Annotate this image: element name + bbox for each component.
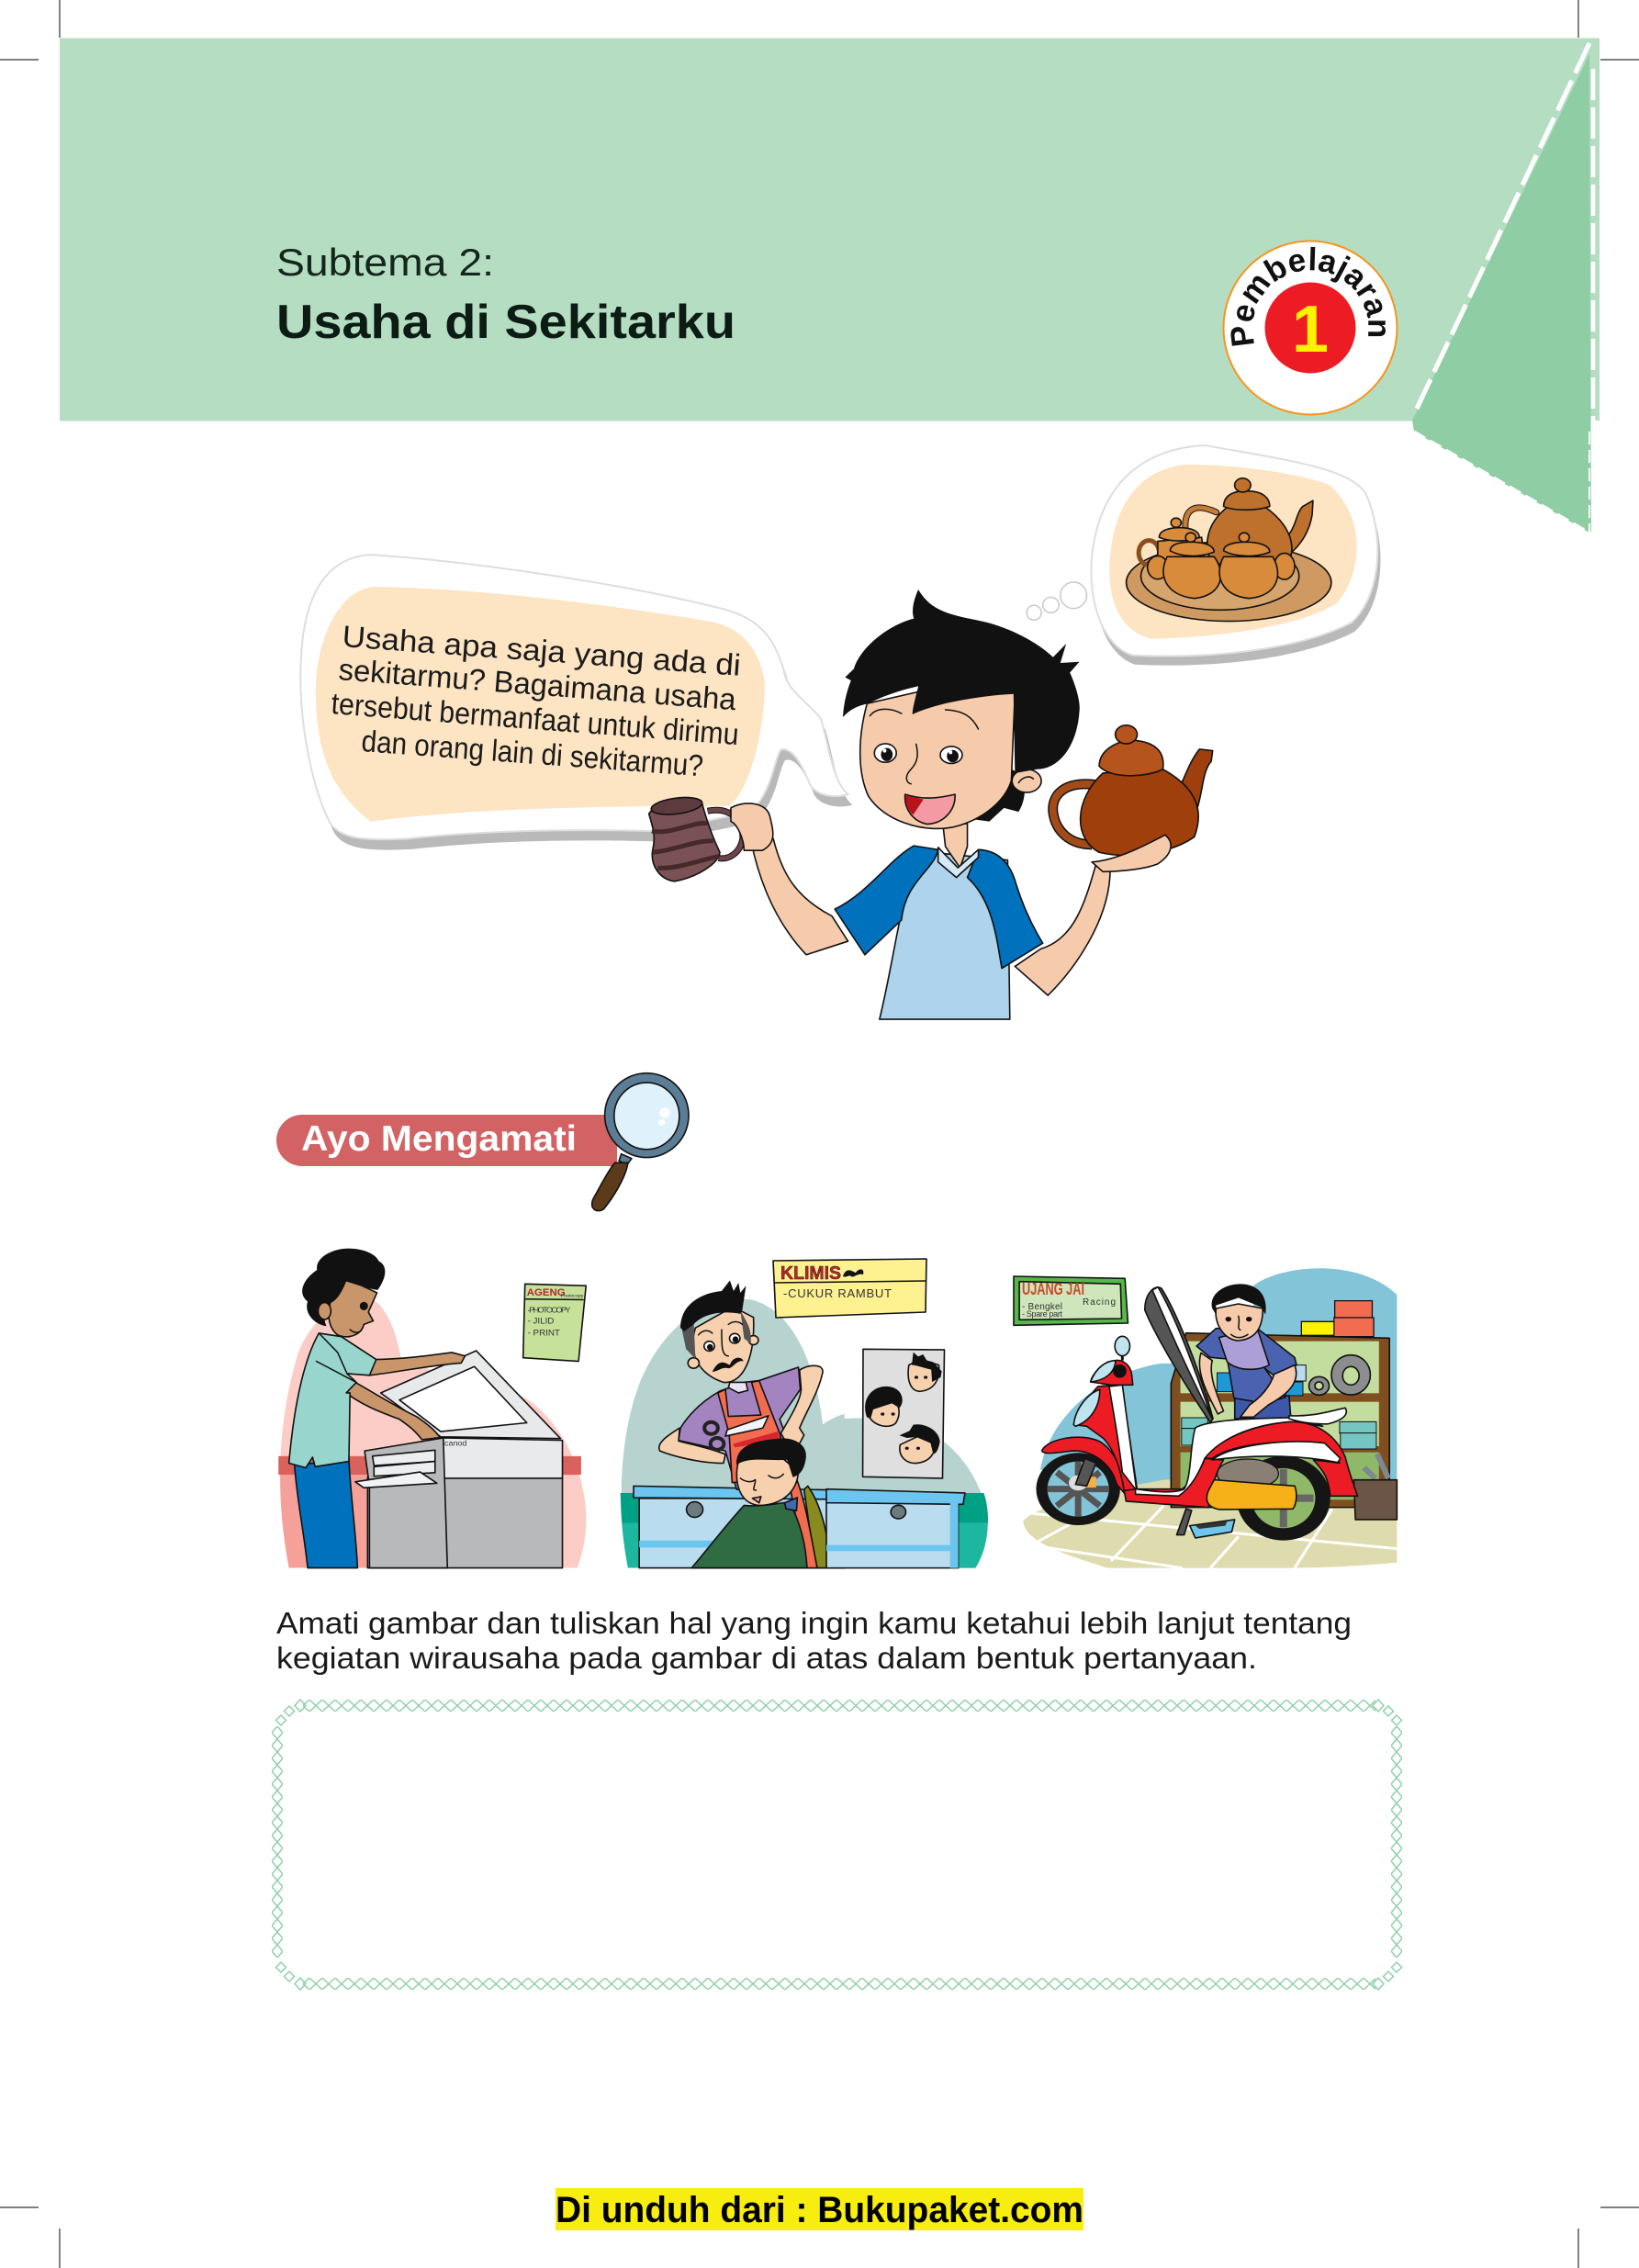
copier: canod [444,1439,467,1447]
badge: Pembelajaran 1: Pembelajaran [1230,246,1386,346]
title: Usaha di Sekitarku [276,296,735,349]
hair [302,1249,385,1326]
bubbles [1027,582,1087,620]
boy character [647,589,1213,1019]
illustration: photocopy shop [278,1249,586,1568]
sign: Ageng photocopy: - PRINT [528,1329,560,1338]
sign text: Ujang Jai: UJANG JAI [1022,1280,1084,1298]
engine panel [1207,1480,1297,1510]
sign: Ageng photocopy: -PHOTOCOPY [528,1306,571,1315]
pink background [280,1298,586,1568]
speech text [330,619,742,782]
leg shield white [1109,1385,1137,1490]
hair [843,589,1080,773]
sign: Ujang Jai [1014,1276,1128,1325]
red rear body [1205,1421,1358,1496]
speech bubble [300,555,852,850]
instruction text [276,1607,1352,1676]
sign: Ageng photocopy [523,1284,586,1362]
speech text: dan orang lain di sekitarmu? [360,724,704,782]
moustache, eyes [713,1358,744,1372]
arm left [751,839,848,955]
sign: Klimis: KLIMIS [780,1263,841,1284]
arm right [1015,866,1110,995]
front body red [1075,1385,1138,1490]
collar [938,848,979,878]
sleeve right [968,849,1043,969]
barber's body [679,1367,801,1489]
mechanic [1196,1284,1297,1419]
subtitle: Subtema 2: [276,241,494,284]
face [329,1279,377,1337]
white stripe [1212,1442,1341,1463]
instruction text: kegiatan wirausaha pada gambar di atas dalam bentuk pertanyaan. [276,1642,1257,1676]
front fender [1042,1437,1126,1495]
brows and nose [870,709,1033,784]
right half [826,1349,988,1568]
back hair [975,769,1025,822]
mouth [905,794,955,825]
collar [728,1382,747,1393]
eye [360,1302,368,1310]
shelf [1171,1301,1389,1508]
section label: Ayo Mengamati: Ayo Mengamati [301,1119,577,1159]
speech text: Usaha apa saja yang ada di [341,619,742,682]
badge: Pembelajaran 1: 1 [1292,293,1329,366]
sign: Ageng photocopy: Photocopy [560,1294,584,1298]
big teapot [1185,478,1313,565]
sign: Klimis [773,1259,926,1318]
speech text: tersebut bermanfaat untuk dirimu [330,686,740,751]
left half [621,1280,845,1568]
pants [295,1460,357,1568]
mug [647,794,743,881]
icon: magnifying glass [592,1073,689,1211]
sign: Klimis: -CUKUR RAMBUT [783,1286,892,1300]
rear wheel [1237,1456,1330,1541]
scooter [1036,1287,1358,1541]
tray [1127,542,1331,622]
small cups [1139,518,1295,599]
hand right [1092,835,1171,871]
seat [1289,1408,1346,1424]
shirt [289,1333,376,1467]
customer's head [736,1451,799,1506]
face [693,1307,754,1383]
hand left [731,803,773,850]
white body panel [1136,1418,1323,1496]
poster with haircut heads [863,1349,945,1478]
cape [691,1502,807,1568]
headlight and mirror [1091,1360,1133,1385]
sleeve left [835,846,938,955]
sign text: Ujang Jai [1022,1280,1116,1319]
lower frame red [1124,1458,1223,1508]
section label: Ayo Mengamati [276,1115,617,1166]
arms [369,1353,465,1375]
face [860,688,1015,828]
download tag: Di unduh dari : Bukupaket.com [556,2190,1083,2230]
barber's trousers and apron tail [804,1486,831,1568]
apron [718,1381,789,1483]
sign: Ageng photocopy: AGENG [527,1287,566,1298]
badge: Pembelajaran 1 [1223,241,1398,415]
sign text: Ujang Jai: Racing [1083,1297,1116,1308]
speech text: sekitarmu? Bagaimana usaha [337,652,738,716]
thought bubble with tea set [1027,445,1381,666]
illustration: motorbike workshop [1014,1268,1397,1568]
sign text: Ujang Jai: - Spare part [1022,1309,1062,1319]
answer box with diamond border [272,1700,1402,1990]
folded corner triangle [1412,43,1602,534]
side hair [681,1318,695,1359]
windshield [1145,1287,1213,1422]
blue background [1040,1268,1397,1499]
instruction text: Amati gambar dan tuliskan hal yang ingin kamu ketahui lebih lanjut tentang [276,1607,1352,1641]
neck [943,824,968,868]
hair [680,1280,746,1331]
tool box [1353,1454,1397,1520]
shirt [880,850,1010,1019]
teapot [1053,725,1213,856]
comb and scissors [733,1432,780,1447]
wheel hub [1218,1459,1278,1488]
eyes [874,744,962,763]
floor [1023,1477,1397,1568]
sign text: Ujang Jai: - Bengkel [1022,1302,1062,1312]
ear [319,1303,331,1319]
basin [1190,1520,1235,1538]
header banner [60,39,1602,534]
ear [1012,769,1041,792]
arms [659,1428,725,1463]
illustration: barbershop [621,1259,988,1568]
front wheel [1036,1453,1120,1525]
copier [355,1351,563,1568]
sign: Ageng photocopy: - JILID [528,1317,555,1326]
